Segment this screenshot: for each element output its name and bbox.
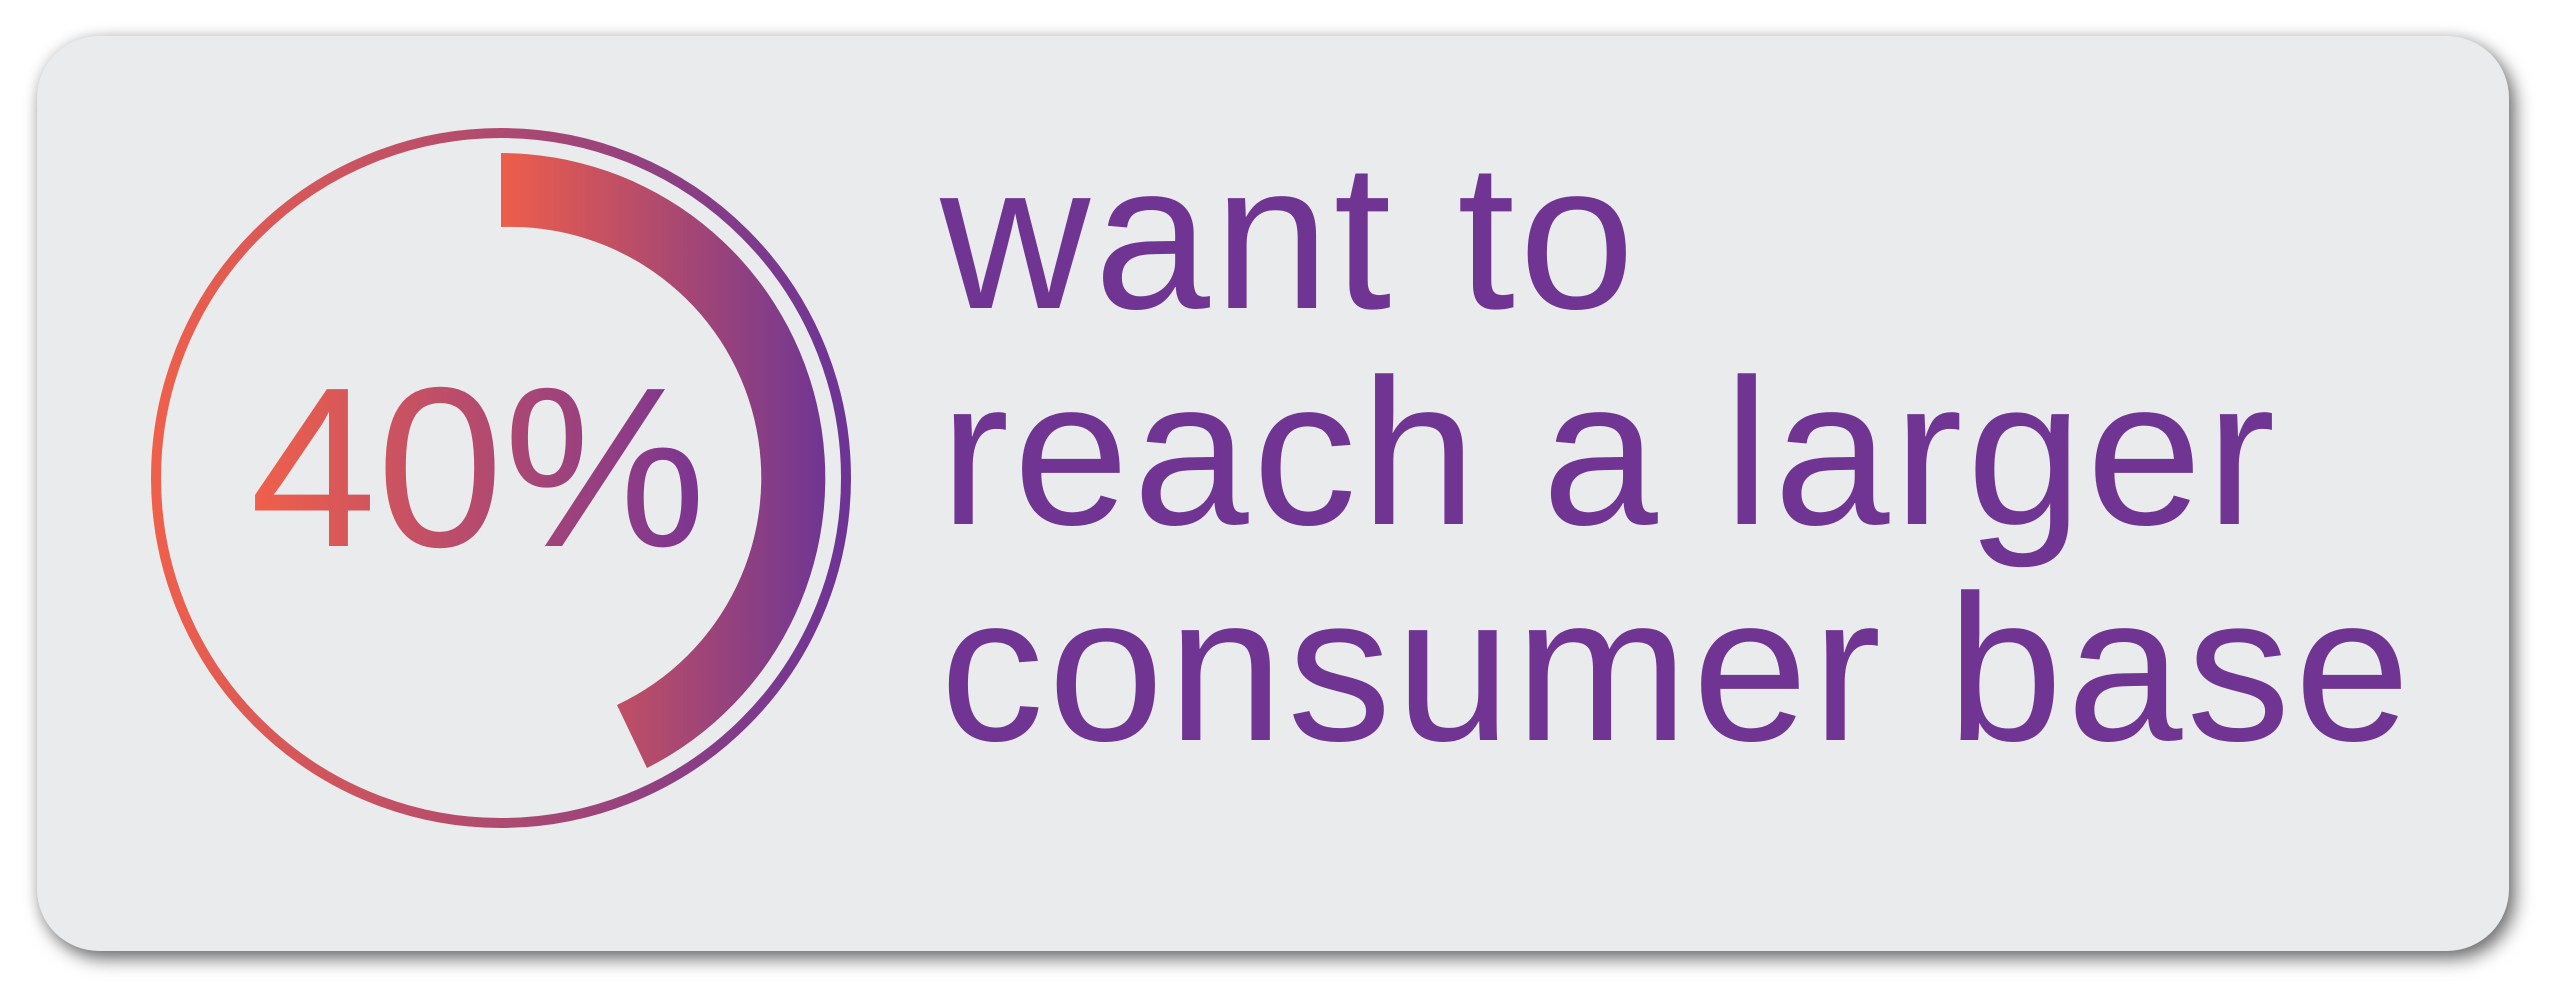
thick progress arc bbox=[501, 153, 825, 768]
thin outer ring bbox=[156, 133, 846, 823]
percentage text: 40% bbox=[250, 341, 706, 595]
text block: description bbox=[940, 121, 2414, 785]
text block: description: consumer base bbox=[940, 553, 2414, 785]
text block: description: reach a larger bbox=[940, 337, 2279, 569]
text block: description: want to bbox=[940, 121, 1639, 353]
